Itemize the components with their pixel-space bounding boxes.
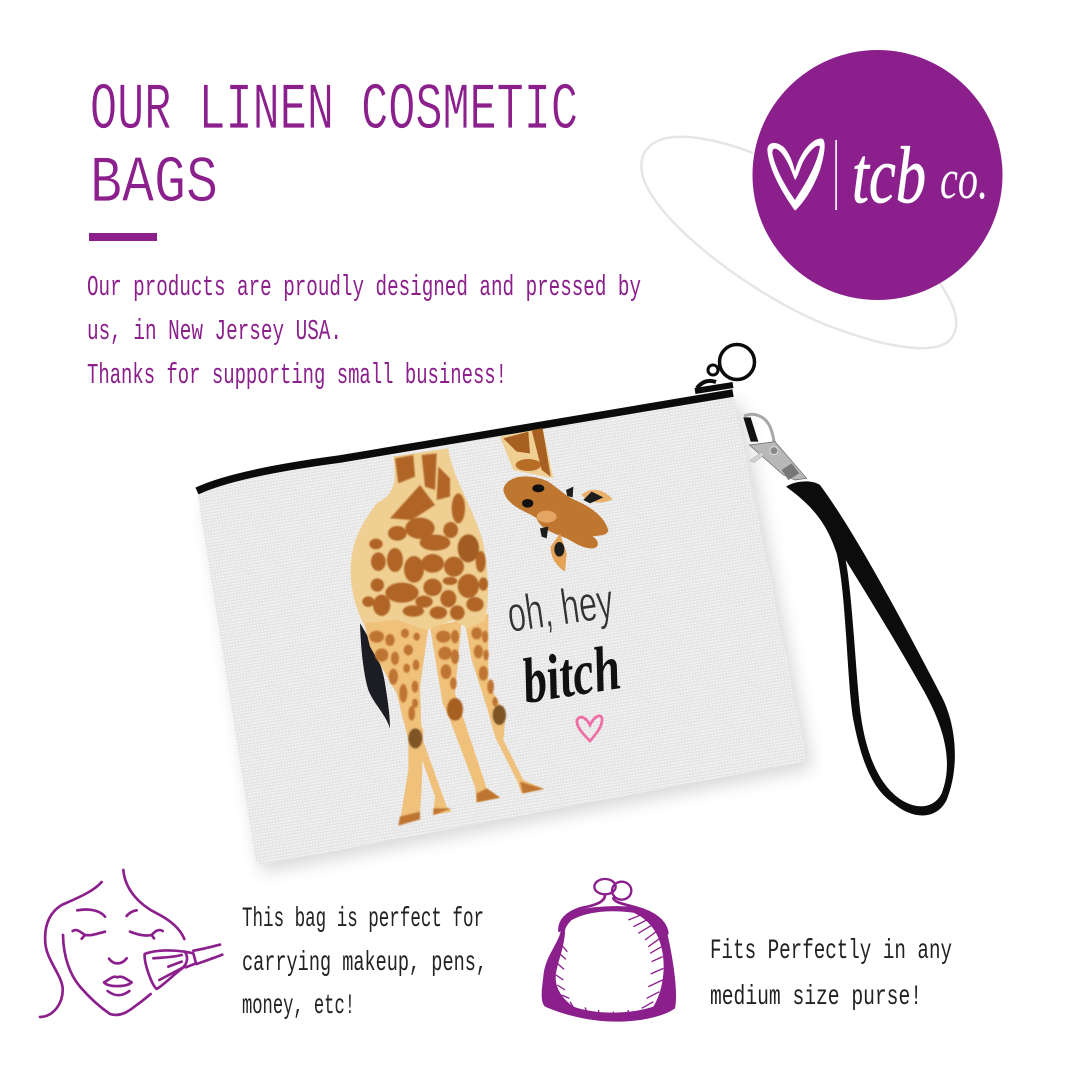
- tail: [360, 623, 390, 728]
- logo wordmark: co.: [940, 149, 988, 211]
- leg patches: [369, 627, 544, 826]
- slogan: [504, 573, 625, 741]
- logo badge: [752, 50, 1002, 300]
- purse body: [542, 906, 676, 1022]
- intro paragraph: us, in New Jersey USA.: [87, 315, 342, 348]
- text: bag use: [242, 904, 487, 1022]
- bag shadow: [205, 402, 812, 872]
- text: purse fit: Fits Perfectly in any: [710, 936, 952, 967]
- text: bag use: This bag is perfect for: [242, 904, 484, 935]
- purse hatching: [556, 913, 663, 1019]
- text: purse fit: medium size purse!: [710, 982, 922, 1013]
- heading: [90, 73, 578, 221]
- intro paragraph: Our products are proudly designed and pressed by: [87, 271, 641, 304]
- heading underline: [89, 233, 157, 241]
- text: purse fit: [710, 936, 952, 1013]
- key ring and pull: [695, 344, 754, 391]
- zipper: [197, 393, 733, 491]
- body spots: [362, 453, 488, 620]
- slogan: oh, hey: oh, hey: [504, 573, 616, 643]
- icon: coin purse: [542, 879, 676, 1022]
- neck and head: [500, 428, 613, 572]
- heading: BAGS: [90, 146, 218, 221]
- body: [351, 448, 488, 630]
- intro paragraph: [87, 271, 641, 392]
- cosmetic bag: [197, 344, 955, 872]
- intro paragraph: Thanks for supporting small business!: [87, 359, 507, 392]
- legs: [363, 613, 544, 825]
- clasp: [743, 414, 807, 480]
- text: bag use: money, etc!: [242, 991, 355, 1022]
- text: bag use: carrying makeup, pens,: [242, 948, 487, 979]
- giraffe: [351, 428, 613, 826]
- logo wordmark: tcb: [852, 132, 926, 220]
- pink heart: [577, 716, 602, 741]
- strap: [743, 414, 955, 815]
- slogan: bitch: bitch: [517, 631, 625, 717]
- purse clasp: [559, 879, 667, 933]
- heading: OUR LINEN COSMETIC: [90, 73, 578, 148]
- logo divider: [835, 140, 837, 210]
- icon: face with makeup brush: [40, 870, 222, 1017]
- logo heart: [767, 138, 825, 211]
- orbit ellipse: [641, 137, 956, 348]
- fabric panel: [197, 393, 806, 864]
